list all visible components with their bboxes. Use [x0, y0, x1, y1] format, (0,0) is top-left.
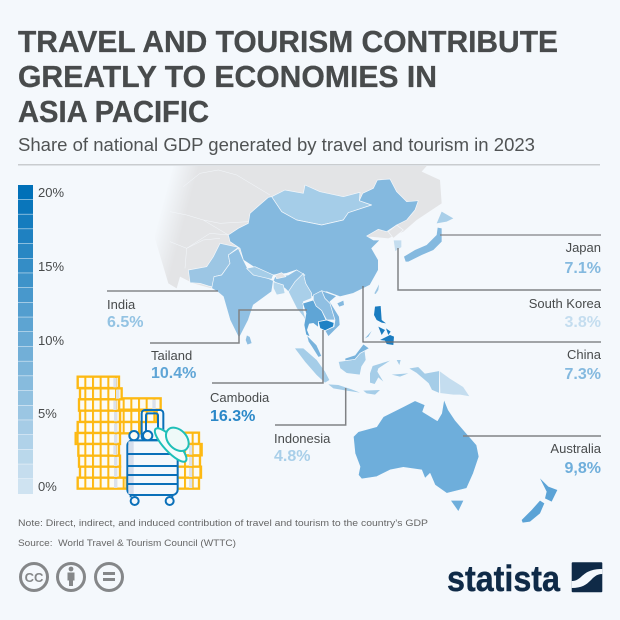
scale labels: 0%: [38, 479, 57, 494]
subtitle: Share of national GDP generated by travel and tourism in 2023: [18, 135, 535, 155]
Bangladesh: [273, 282, 285, 295]
callout: China: 7.3%: [565, 366, 601, 383]
icon: statista mark: [572, 562, 602, 592]
callout: South Korea: 3.8%: [565, 314, 601, 331]
South-East Asia: [295, 284, 408, 395]
callout: Australia: [463, 436, 602, 477]
title: ASIA PACIFIC: [18, 94, 209, 129]
logo: statista: statista: [447, 558, 561, 599]
Small islands: [363, 360, 408, 395]
Cambodia: [318, 320, 334, 331]
callout: Cambodia: [210, 330, 323, 425]
Bhutan: [275, 273, 286, 279]
Papua New Guinea: [439, 371, 470, 397]
New Zealand: [522, 478, 557, 523]
Java: [328, 384, 360, 393]
callout: Japan: [440, 235, 601, 277]
callout: Australia: 9,8%: [565, 460, 601, 477]
callout: China: China: [567, 347, 602, 362]
icon: no derivatives: [96, 564, 122, 590]
map: [133, 166, 557, 523]
title: GREATLY TO ECONOMIES IN: [18, 59, 437, 94]
callout: Indonesia: Indonesia: [274, 431, 331, 446]
Hainan: [337, 301, 344, 307]
callout: Indonesia: [274, 388, 346, 465]
Japan: [404, 212, 453, 262]
icon: coin stacks: [76, 377, 202, 489]
Sumatra: [295, 348, 329, 383]
callout: South Korea: South Korea: [529, 296, 602, 311]
Tasmania: [451, 501, 463, 511]
source: Source: World Travel & Tourism Council (WTTC): [18, 538, 236, 549]
icon: suitcase: [127, 410, 178, 505]
China: [228, 179, 418, 298]
callout: Tailand: Tailand: [151, 348, 192, 363]
icon: attribution: [58, 564, 84, 590]
callout: India: India: [107, 297, 136, 312]
Nepal: [247, 267, 273, 279]
Pakistan: [188, 243, 238, 288]
callout: Cambodia: Cambodia: [210, 390, 270, 405]
icon: creative commons licence: [20, 564, 122, 590]
Australia: [353, 399, 479, 493]
title: [18, 24, 558, 129]
Thailand: [303, 300, 326, 337]
scale labels: 5%: [38, 406, 57, 421]
Taiwan: [374, 284, 379, 294]
callout: China: [363, 286, 602, 383]
Sri Lanka: [245, 335, 252, 345]
Mongolia: [272, 185, 372, 225]
Laos: [313, 291, 335, 320]
title: TRAVEL AND TOURISM CONTRIBUTE: [18, 24, 558, 59]
icon: coins and suitcase: [76, 377, 202, 505]
callout: South Korea: [398, 248, 602, 331]
North Korea: [388, 225, 403, 238]
callout: India: 6.5%: [107, 314, 143, 331]
callout: Tailand: [150, 310, 307, 382]
callout: Japan: Japan: [566, 240, 601, 255]
New Guinea, Indonesia: [408, 367, 439, 393]
scale labels: [38, 185, 64, 494]
legend: [18, 185, 64, 494]
note: Note: Direct, indirect, and induced contribution of travel and tourism to the country’s GDP: [18, 518, 428, 529]
Vietnam: [322, 291, 340, 337]
South Korea: [393, 240, 402, 252]
Borneo: [338, 348, 369, 375]
scale labels: 10%: [38, 333, 64, 348]
callout: Indonesia: 4.8%: [274, 448, 310, 465]
icon: hat: [151, 423, 193, 466]
callout: Tailand: 10.4%: [151, 365, 196, 382]
Malaysian peninsula: [307, 335, 322, 357]
scale labels: 20%: [38, 185, 64, 200]
callout: India: [107, 291, 218, 331]
Philippines: [365, 306, 394, 345]
Malaysian Borneo: [345, 344, 369, 361]
Myanmar: [288, 273, 312, 323]
grey surrounding land: [133, 166, 442, 288]
callout: Australia: Australia: [550, 441, 602, 456]
India: [212, 248, 305, 338]
callout: Cambodia: 16.3%: [210, 408, 255, 425]
colour scale: [18, 185, 33, 494]
scale labels: 15%: [38, 259, 64, 274]
coin shading: [113, 378, 192, 488]
callout: Japan: 7.1%: [565, 260, 601, 277]
Sulawesi: [370, 361, 390, 384]
icon: cc: CC: [25, 570, 44, 585]
